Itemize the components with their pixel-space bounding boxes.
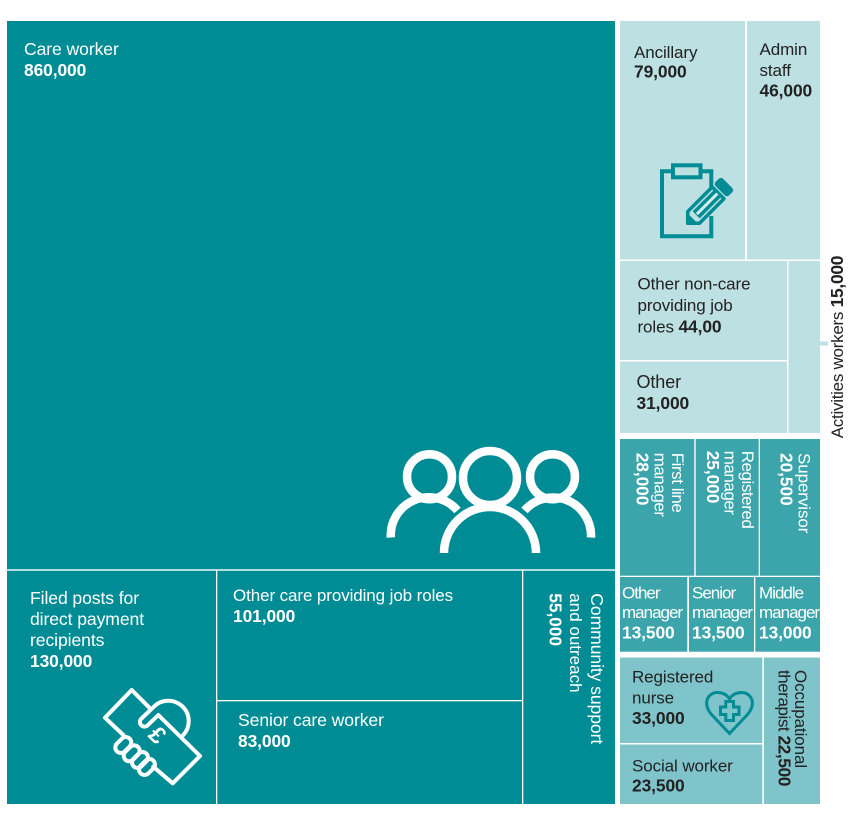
panel: other manager: Other (622, 583, 661, 602)
panel: admin staff (747, 21, 820, 260)
icon: clipboard and pencil (662, 165, 734, 236)
panel: ancillary (620, 21, 745, 260)
panel: first line manager: manager (650, 453, 670, 517)
panel: registered nurse: Registered (632, 668, 713, 687)
panel: activities workers: Activities workers 15,000 (827, 256, 847, 438)
panel: admin staff: 46,000 (760, 81, 812, 101)
panel: first line manager: 28,000 (633, 453, 653, 505)
panel: registered nurse: 33,000 (632, 708, 685, 728)
panel: activities workers (788, 256, 847, 438)
panel: registered manager: manager (720, 451, 739, 515)
panel: supervisor: Supervisor (794, 453, 813, 534)
treemap group: other roles (light) (620, 21, 847, 438)
panel: first line manager: First line (668, 453, 687, 512)
panel: community support and outreach (523, 571, 615, 804)
panel: care worker (7, 21, 615, 569)
panel: admin staff: staff (760, 61, 791, 80)
panel: first line manager (620, 439, 694, 576)
panel: registered manager (696, 439, 759, 576)
panel: other non-care providing job roles (620, 261, 787, 360)
panel: supervisor: 20,500 (777, 453, 797, 506)
panel: occupational therapist: therapist 22,500 (774, 670, 794, 786)
panel: other care providing job roles (217, 571, 522, 700)
icon: group of people (391, 451, 591, 553)
treemap group: care-providing roles (7, 21, 615, 804)
panel: filled posts for direct payment recipients: 130,000 (30, 651, 92, 671)
panel: community support and outreach: 55,000 (545, 593, 565, 646)
panel: other manager: 13,500 (622, 622, 675, 642)
panel: senior care worker: Senior care worker (238, 710, 384, 730)
panel: filled posts for direct payment recipients (7, 571, 216, 804)
panel: registered nurse (620, 658, 762, 743)
panel: other manager (620, 577, 687, 652)
panel: ancillary: 79,000 (634, 62, 687, 82)
panel: social worker (620, 744, 762, 804)
panel: filled posts for direct payment recipients: Filed posts for (30, 588, 139, 608)
panel: middle manager: manager (759, 603, 820, 622)
panel: senior manager: Senior (692, 583, 736, 602)
panel: community support and outreach: Community support (587, 593, 607, 744)
icon: heart with cross (707, 692, 752, 734)
icon: hand holding pound note (105, 690, 200, 783)
panel: admin staff: Admin (760, 40, 807, 59)
panel: other non-care providing job roles: providing job (638, 296, 733, 315)
panel: filled posts for direct payment recipients: direct payment (30, 609, 144, 629)
panel: other non-care providing job roles: roles 44,00 (638, 316, 722, 336)
panel: ancillary: Ancillary (634, 43, 698, 62)
panel: care worker: Care worker (24, 39, 119, 59)
panel: social worker: Social worker (632, 757, 733, 776)
panel: other manager: manager (622, 603, 683, 622)
panel: social worker: 23,500 (632, 776, 685, 796)
panel: other: 31,000 (636, 393, 689, 413)
panel: middle manager (755, 577, 820, 652)
panel: senior manager (689, 577, 754, 652)
panel: senior care worker: 83,000 (238, 731, 291, 751)
panel: other: Other (636, 372, 681, 392)
treemap group: regulated professions (620, 658, 820, 804)
panel: registered nurse: nurse (632, 688, 674, 707)
panel: senior manager: 13,500 (692, 622, 745, 642)
panel: registered manager: Registered (738, 451, 757, 528)
panel: senior care worker (217, 701, 522, 804)
panel: filled posts for direct payment recipients: recipients (30, 630, 105, 650)
treemap group: managers (620, 439, 820, 652)
panel: middle manager: Middle (759, 583, 804, 602)
panel: other non-care providing job roles: Other non-care (638, 274, 750, 293)
icon: hand holding pound note: £ (143, 721, 172, 750)
panel: other (620, 362, 787, 433)
panel: care worker: 860,000 (24, 60, 86, 80)
panel: middle manager: 13,000 (759, 622, 812, 642)
panel: occupational therapist (764, 658, 820, 804)
panel: registered manager: 25,000 (703, 451, 723, 503)
panel: supervisor (760, 439, 820, 576)
panel: community support and outreach: and outreach (566, 593, 585, 693)
panel: occupational therapist: Occupational (791, 670, 810, 768)
panel: other care providing job roles: 101,000 (233, 606, 295, 626)
panel: senior manager: manager (692, 603, 753, 622)
panel: other care providing job roles: Other care providing job roles (233, 586, 453, 605)
